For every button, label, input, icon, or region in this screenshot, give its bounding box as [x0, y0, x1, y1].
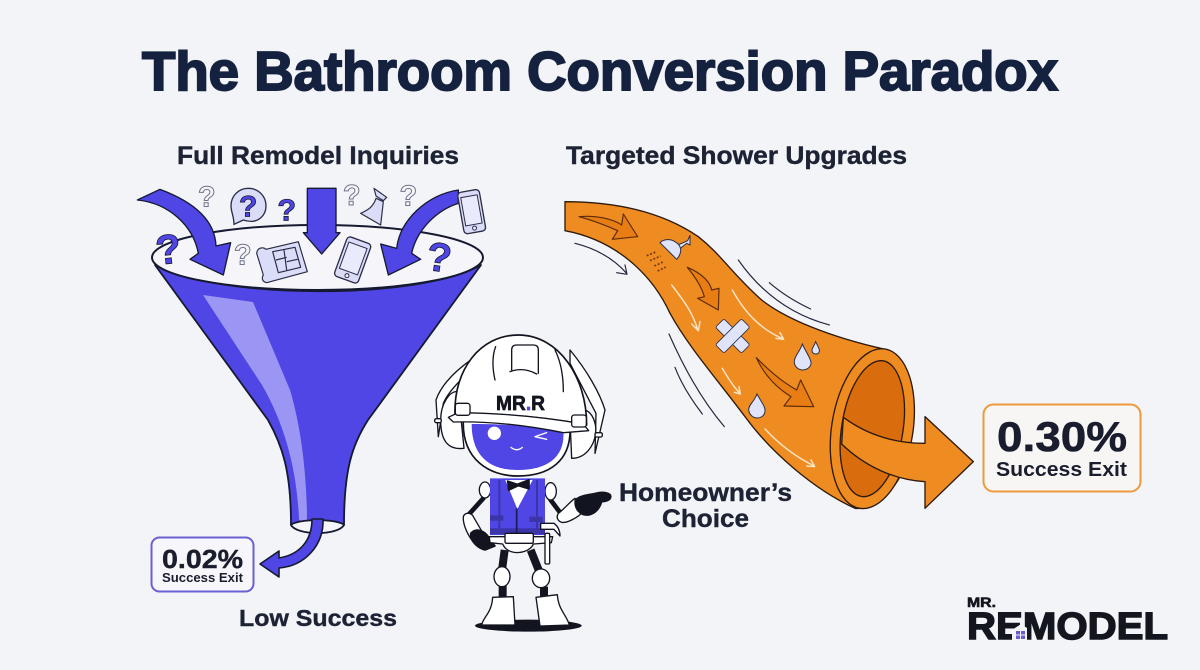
wink and smile [511, 433, 547, 450]
motion lines [575, 243, 829, 427]
ear protectors [435, 350, 605, 458]
question mark large left: ? [153, 224, 183, 274]
orange curved tube [565, 202, 973, 515]
head [463, 420, 570, 476]
ground shadow [475, 620, 582, 632]
icon: bandage [715, 319, 750, 353]
speech bubble question: ? [239, 190, 257, 223]
label: low success: Low Success [239, 605, 397, 631]
hammer [541, 523, 560, 564]
question mark purple: ? [277, 194, 296, 228]
boots [482, 597, 515, 625]
callout: 0.30% success exit: 0.30% [997, 413, 1127, 460]
bow tie [507, 479, 529, 491]
icon: shower head [647, 235, 690, 271]
arrow: centre inflow [303, 188, 340, 254]
helmet text: MR.R [496, 393, 546, 415]
inner arrow 1 [579, 214, 638, 239]
tube opening outer ring [820, 343, 925, 515]
helmet ridges [493, 345, 563, 392]
pointing hand [575, 492, 611, 515]
icon: phone right [457, 189, 486, 234]
funnel rim [152, 225, 483, 290]
question mark outline 4: ? [400, 181, 417, 213]
speech bubble question [231, 188, 266, 224]
funnel inflow icons [137, 180, 486, 284]
tool belt [489, 537, 553, 553]
logo: mr remodel: REMODEL [967, 606, 1168, 648]
inner arrow 3 [756, 358, 814, 407]
white flow arrows [672, 285, 815, 467]
shoulders [479, 482, 491, 498]
tube opening inner [831, 356, 913, 501]
question mark outline 2: ? [234, 239, 252, 271]
logo house window [1012, 624, 1027, 641]
left arm [468, 498, 483, 515]
shirt [505, 480, 533, 509]
title: The Bathroom Conversion Paradox [142, 40, 1058, 102]
vest [490, 478, 545, 535]
face screen [472, 424, 563, 470]
funnel body [155, 265, 481, 533]
heading: targeted shower upgrades: Targeted Shower Upgrades [566, 142, 907, 170]
brim [448, 413, 589, 433]
logo: mr remodel: MR. [967, 594, 996, 610]
callout: 0.30% success exit [984, 404, 1140, 492]
question mark outline 3: ? [343, 180, 361, 212]
funnel outlet [291, 520, 344, 533]
inner arrow 2 [687, 267, 719, 310]
funnel [152, 225, 483, 577]
right arm [551, 500, 563, 516]
tube body [565, 202, 911, 508]
outlet arrow [260, 519, 323, 577]
icon: blueprint [257, 242, 307, 283]
icon: water drops [749, 342, 819, 418]
knees [494, 567, 510, 587]
callout: 0.02% success exit: 0.02% [162, 544, 243, 574]
label: homeowner's choice: Choice [662, 505, 749, 533]
funnel highlight [203, 295, 307, 522]
label: homeowner's choice: Homeowner’s [619, 479, 792, 507]
helmet [455, 335, 587, 425]
question mark large right: ? [424, 233, 455, 282]
vest details [490, 480, 545, 534]
heading: full remodel inquiries: Full Remodel Inquiries [177, 142, 459, 170]
label: homeowner's choice [619, 479, 792, 533]
callout: 0.02% success exit [152, 538, 254, 592]
question mark outline 1: ? [198, 182, 216, 214]
brim clips [455, 403, 470, 415]
legs [502, 550, 544, 598]
arrow: right inflow [381, 190, 458, 275]
icon: spray bottle [361, 188, 387, 225]
exit arrow [842, 417, 973, 508]
icon: phone centre [334, 236, 372, 284]
eye [488, 427, 501, 440]
robot mascot [435, 335, 611, 632]
callout: 0.30% success exit: Success Exit [996, 459, 1127, 481]
callout: 0.02% success exit: Success Exit [162, 571, 244, 585]
arrow: left inflow [137, 189, 231, 275]
